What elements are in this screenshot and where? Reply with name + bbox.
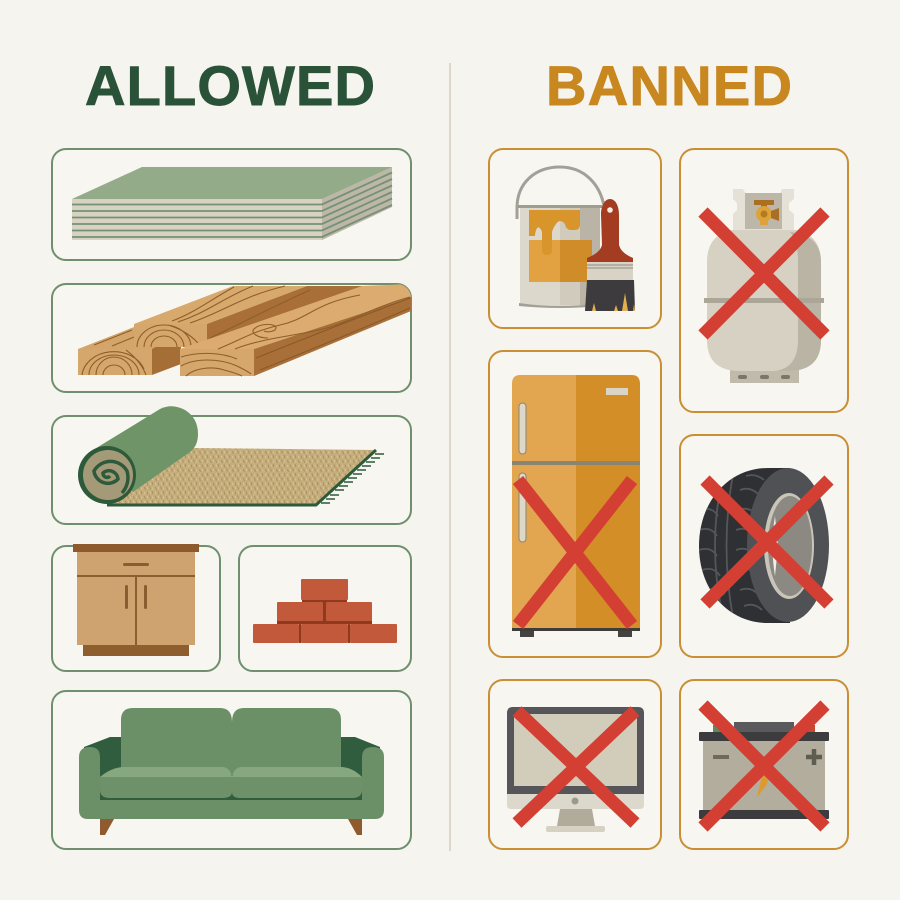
title: allowed: ALLOWED (85, 54, 375, 117)
panel: cabinet (52, 544, 220, 671)
panel: bricks (239, 546, 411, 671)
panel: refrigerator (489, 351, 661, 657)
icon: wood boards (78, 284, 411, 376)
panel: lumber (52, 284, 411, 392)
panel: car battery (680, 680, 848, 849)
icon: red cross (705, 480, 829, 604)
panel: monitor (489, 680, 661, 849)
icon: paint can and brush (517, 167, 635, 311)
icon: tire (699, 468, 829, 623)
icon: red cross (518, 480, 632, 625)
icon: computer monitor (507, 707, 644, 832)
icon: red cross (703, 212, 825, 335)
icon: red cross (703, 705, 825, 827)
panel: sofa (52, 691, 411, 849)
icon: brick pile (253, 579, 397, 643)
title: banned: BANNED (546, 54, 792, 117)
panel: propane tank (680, 149, 848, 412)
panel: paint (489, 149, 661, 328)
icon: red cross (517, 711, 635, 823)
icon: drywall stack (72, 167, 392, 240)
panel: drywall sheets (52, 149, 411, 260)
panel: tire (680, 435, 848, 657)
panel: carpet (52, 406, 411, 524)
icon: fridge (512, 375, 640, 637)
icon: green sofa (79, 708, 384, 835)
icon: rolled carpet (78, 406, 384, 505)
icon: kitchen cabinet (73, 544, 199, 656)
icon: propane cylinder (704, 189, 824, 383)
icon: battery (699, 722, 829, 819)
